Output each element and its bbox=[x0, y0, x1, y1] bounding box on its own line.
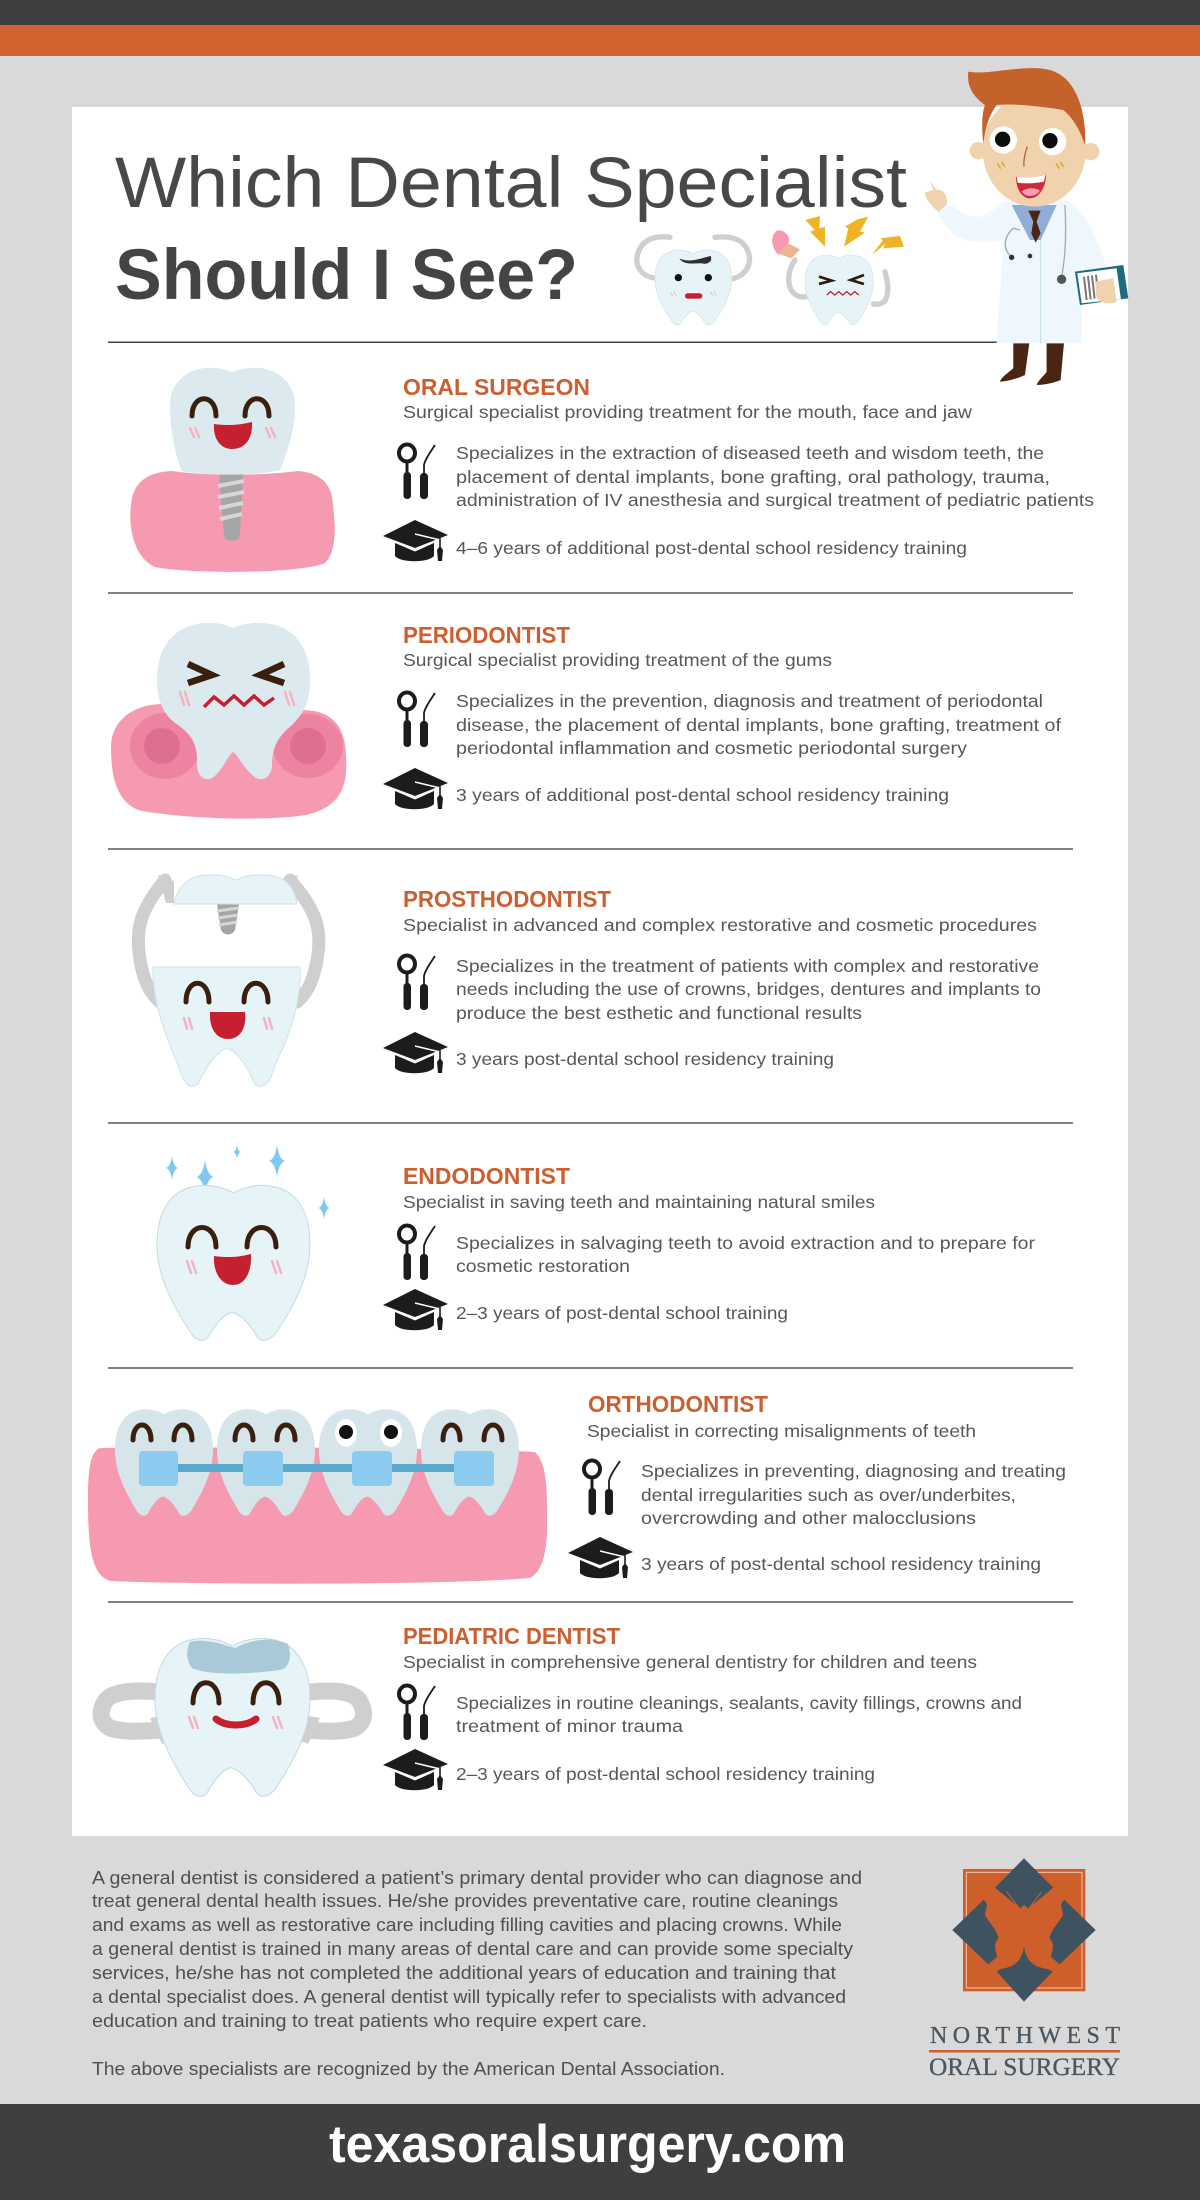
text block: general dentist note bbox=[92, 1868, 862, 2079]
icon: graduation cap bbox=[383, 768, 448, 809]
description: Specializes in routine cleanings, sealants, cavity fillings, crowns and bbox=[456, 1693, 1022, 1713]
description bbox=[456, 691, 1061, 758]
description: Specializes in the prevention, diagnosis and treatment of periodontal bbox=[456, 691, 1043, 711]
icon: dental tools bbox=[399, 692, 435, 747]
description: Specializes in the extraction of diseased teeth and wisdom teeth, the bbox=[456, 443, 1044, 463]
icon: dental tools bbox=[399, 1686, 435, 1740]
shirt and tie bbox=[1012, 205, 1057, 240]
pointing hand bbox=[925, 181, 947, 212]
subtitle: Specialist in saving teeth and maintaining natural smiles bbox=[403, 1192, 875, 1212]
text block: general dentist note: services, he/she has not completed the additional years of education and training that bbox=[92, 1963, 836, 1983]
panel: oral surgeon bbox=[130, 368, 1094, 572]
illustration: tooth with implant bbox=[130, 368, 335, 572]
description: Specializes in salvaging teeth to avoid extraction and to prepare for bbox=[456, 1233, 1035, 1253]
training: 3 years post-dental school residency training bbox=[456, 1049, 834, 1069]
description: Specializes in preventing, diagnosing and treating bbox=[641, 1461, 1066, 1481]
subtitle: Surgical specialist providing treatment for the mouth, face and jaw bbox=[403, 402, 972, 422]
description: dental irregularities such as over/underbites, bbox=[641, 1485, 1016, 1505]
mouth bbox=[1016, 174, 1046, 198]
text block: general dentist note: a dental specialist does. A general dentist will typically refer to specialists with advanced bbox=[92, 1987, 846, 2007]
icon: graduation cap bbox=[383, 1032, 448, 1073]
description: needs including the use of crowns, bridges, dentures and implants to bbox=[456, 979, 1041, 999]
top orange band bbox=[0, 25, 1200, 56]
panel: periodontist bbox=[111, 622, 1061, 819]
subtitle: Surgical specialist providing treatment of the gums bbox=[403, 650, 832, 670]
description: produce the best esthetic and functional results bbox=[456, 1003, 862, 1023]
illustration: teeth with braces bbox=[88, 1409, 547, 1584]
text block: general dentist note: a general dentist is trained in many areas of dental care and can provide some specialty bbox=[92, 1939, 853, 1959]
heading: ENDODONTIST bbox=[403, 1163, 570, 1189]
subtitle: Specialist in correcting misalignments of teeth bbox=[587, 1421, 976, 1441]
title bbox=[115, 144, 907, 315]
icon: dental tools bbox=[399, 444, 435, 499]
description bbox=[456, 1233, 1035, 1276]
description bbox=[456, 1693, 1022, 1736]
top dark band bbox=[0, 0, 1200, 25]
heading: ORAL SURGEON bbox=[403, 374, 590, 400]
hair bbox=[968, 68, 1085, 145]
icon: dental tools bbox=[584, 1460, 620, 1515]
text block: general dentist note: treat general dental health issues. He/she provides preventative care, routine cleanings bbox=[92, 1891, 838, 1911]
title: Which Dental Specialist bbox=[115, 144, 907, 223]
subtitle: Specialist in advanced and complex restorative and cosmetic procedures bbox=[403, 915, 1037, 935]
footer website: texasoralsurgery.com bbox=[329, 2115, 846, 2174]
description: administration of IV anesthesia and surgical treatment of pediatric patients bbox=[456, 490, 1094, 510]
icon: graduation cap bbox=[383, 1289, 448, 1330]
panel: orthodontist bbox=[88, 1391, 1066, 1584]
description bbox=[641, 1461, 1066, 1528]
description bbox=[456, 443, 1094, 510]
heading: PROSTHODONTIST bbox=[403, 886, 611, 912]
illustration: tooth crown on implant bbox=[138, 875, 319, 1086]
description: cosmetic restoration bbox=[456, 1256, 630, 1276]
description: treatment of minor trauma bbox=[456, 1716, 683, 1736]
white main panel bbox=[72, 107, 1128, 1836]
stethoscope bbox=[1005, 205, 1066, 277]
icon: two small tooth characters bbox=[637, 216, 904, 325]
illustration: tooth with filling bbox=[101, 1638, 364, 1796]
illustration: sparkling tooth bbox=[157, 1145, 330, 1340]
panel: pediatric dentist bbox=[101, 1623, 1022, 1796]
description: Specializes in the treatment of patients with complex and restorative bbox=[456, 956, 1039, 976]
subtitle: Specialist in comprehensive general dentistry for children and teens bbox=[403, 1652, 977, 1672]
footer band bbox=[0, 2104, 1200, 2200]
icon: doctor character bbox=[925, 68, 1128, 385]
description: placement of dental implants, bone grafting, oral pathology, trauma, bbox=[456, 467, 1050, 487]
icon: dental tools bbox=[399, 1226, 435, 1280]
logo: Northwest Oral Surgery bbox=[929, 1858, 1120, 2081]
training: 2–3 years of post-dental school residency training bbox=[456, 1764, 875, 1784]
logo wordmark: NORTHWEST bbox=[930, 2023, 1120, 2049]
heading: PERIODONTIST bbox=[403, 622, 570, 648]
description: overcrowding and other malocclusions bbox=[641, 1508, 976, 1528]
lab coat bbox=[937, 200, 1113, 343]
illustration: tooth in inflamed gums bbox=[111, 623, 346, 819]
title: Should I See? bbox=[115, 236, 578, 315]
logo: Northwest Oral Surgery: ORAL SURGERY bbox=[929, 2054, 1120, 2081]
text block: general dentist note: and exams as well as restorative care including filling cavities and placing crowns. While bbox=[92, 1915, 842, 1935]
icon: graduation cap bbox=[568, 1537, 633, 1578]
logo mark bbox=[952, 1858, 1096, 2002]
icon: graduation cap bbox=[383, 1749, 448, 1790]
text block: general dentist note: education and training to treat patients who require expert care. bbox=[92, 2011, 647, 2031]
heading: PEDIATRIC DENTIST bbox=[403, 1623, 620, 1649]
eyes bbox=[990, 126, 1017, 154]
training: 3 years of post-dental school residency training bbox=[641, 1554, 1041, 1574]
training: 3 years of additional post-dental school residency training bbox=[456, 785, 949, 805]
icon: dental tools bbox=[399, 956, 435, 1010]
description bbox=[456, 956, 1041, 1023]
panel: endodontist bbox=[157, 1145, 1035, 1340]
head bbox=[970, 142, 987, 159]
description: disease, the placement of dental implants, bone grafting, treatment of bbox=[456, 715, 1061, 735]
text block: general dentist note: A general dentist is considered a patient’s primary dental provider who can diagnose and bbox=[92, 1868, 862, 1888]
description: periodontal inflammation and cosmetic periodontal surgery bbox=[456, 738, 967, 758]
training: 4–6 years of additional post-dental school residency training bbox=[456, 538, 967, 558]
text block: general dentist note: The above specialists are recognized by the American Dental Association. bbox=[92, 2059, 725, 2079]
training: 2–3 years of post-dental school training bbox=[456, 1303, 788, 1323]
heading: ORTHODONTIST bbox=[588, 1391, 768, 1417]
icon: graduation cap bbox=[383, 520, 448, 561]
legs bbox=[1000, 343, 1064, 385]
clipboard bbox=[1075, 265, 1128, 305]
panel: prosthodontist bbox=[138, 875, 1041, 1086]
